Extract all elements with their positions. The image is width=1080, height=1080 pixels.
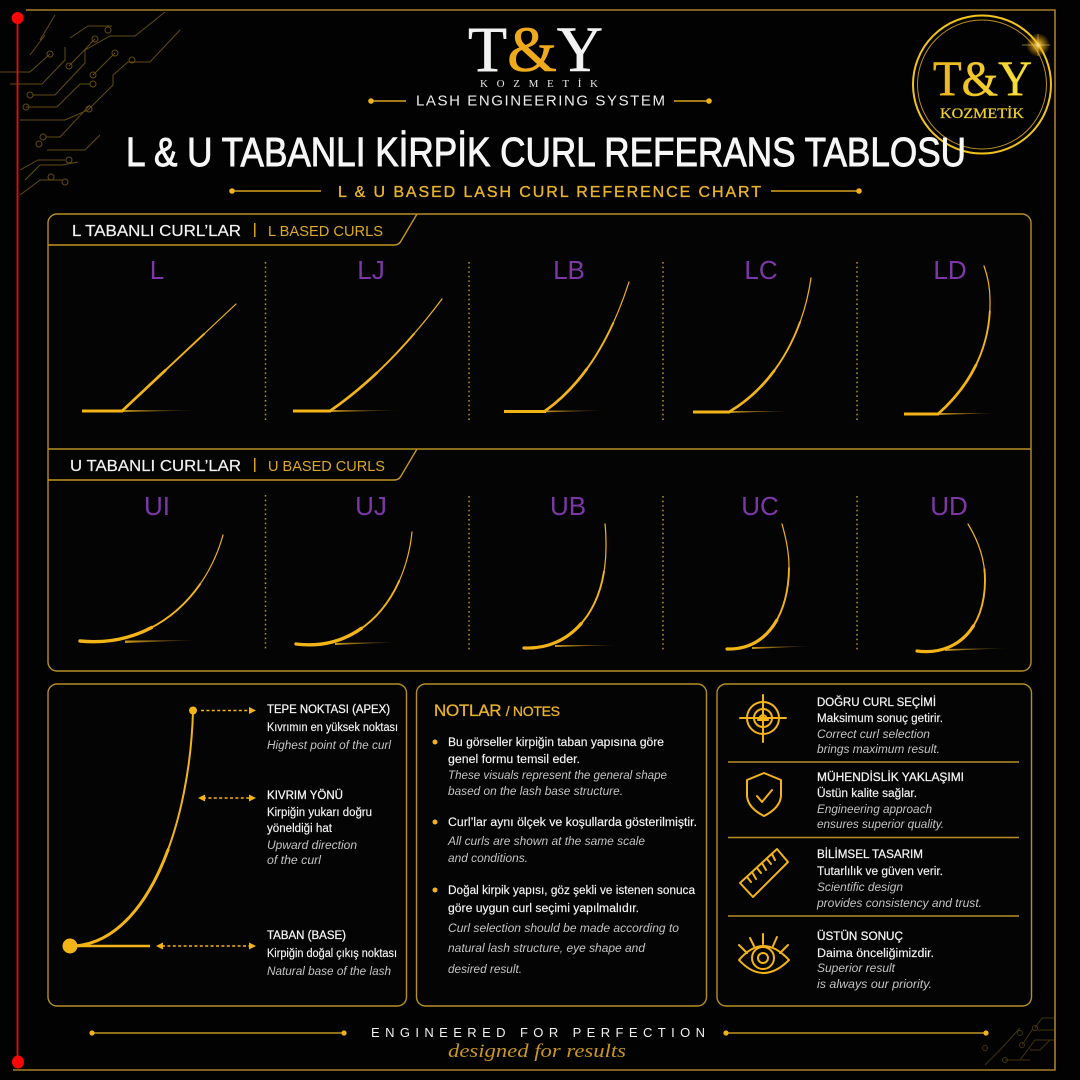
text: base: TABAN (BASE) — [267, 930, 346, 942]
footer: designed for results — [448, 1041, 626, 1062]
panel: notes — [416, 684, 706, 1006]
label: UJ: UJ — [355, 491, 387, 521]
curve: UC — [727, 524, 815, 649]
text: superior result: Daima önceliğimizdir. — [817, 948, 934, 960]
text: superior result: ÜSTÜN SONUÇ — [817, 931, 903, 943]
label: UI: UI — [144, 491, 170, 521]
note 2 — [432, 817, 697, 865]
text: correct curl: Correct curl selection — [817, 729, 930, 741]
text: superior result — [817, 931, 934, 991]
text: scientific design — [816, 848, 982, 910]
curl: LD — [904, 255, 1000, 415]
text: scientific design: BİLİMSEL TASARIM — [817, 848, 923, 861]
panel: curl chart — [48, 214, 1031, 671]
note 2: Curl’lar aynı ölçek ve koşullarda gösterilmiştir. — [448, 817, 697, 829]
text: superior result: Superior result — [817, 963, 896, 975]
curl: LJ — [293, 255, 442, 412]
text: curl direction — [267, 790, 372, 867]
curve: UD — [917, 524, 1010, 652]
curve: L — [82, 304, 236, 412]
text: correct curl: DOĞRU CURL SEÇİMİ — [817, 696, 936, 709]
note 3: Curl selection should be made according to — [448, 923, 680, 935]
text: scientific design: Scientific design — [817, 882, 903, 894]
tab: U based curls: U BASED CURLS — [268, 459, 385, 475]
diagram: lash curve — [62, 706, 197, 954]
panel: lash anatomy — [48, 684, 406, 1006]
label: LC: LC — [744, 255, 778, 285]
icon: ruler — [740, 849, 788, 897]
curl: UI — [80, 491, 223, 643]
text: apex: TEPE NOKTASI (APEX) — [267, 704, 390, 716]
text: base — [267, 930, 397, 978]
text: curl direction: Kirpiğin yukarı doğru — [267, 807, 372, 819]
note 3 — [432, 885, 696, 976]
curl: L — [82, 255, 236, 412]
note 2: All curls are shown at the same scale — [447, 836, 645, 848]
arrow: curl direction — [198, 794, 256, 802]
arrow: apex — [201, 707, 256, 714]
note 1: genel formu temsil eder. — [448, 754, 580, 766]
text: curl direction: of the curl — [267, 855, 321, 867]
text: apex — [267, 704, 398, 752]
note 2: and conditions. — [448, 853, 528, 865]
text: engineering: MÜHENDİSLİK YAKLAŞIMI — [817, 771, 964, 784]
curl: LB — [504, 255, 629, 412]
footer — [89, 1025, 989, 1062]
title: L & U TABANLI KİRPİK CURL REFERANS TABLOSU — [126, 129, 966, 175]
footer: ENGINEERED FOR PERFECTION — [371, 1025, 705, 1040]
note 3: Doğal kirpik yapısı, göz şekli ve istenen sonuca — [448, 885, 696, 897]
text: engineering: ensures superior quality. — [817, 819, 944, 831]
note 1: Bu görseller kirpiğin taban yapısına göre — [448, 737, 664, 749]
red side line — [12, 12, 24, 1068]
icon: shield — [747, 773, 781, 816]
label: UD: UD — [930, 491, 968, 521]
curve: LC — [693, 278, 811, 413]
text: scientific design: provides consistency and trust. — [816, 898, 982, 910]
text: base: Kirpiğin doğal çıkış noktası — [267, 948, 397, 960]
text: engineering: Üstün kalite sağlar. — [817, 788, 917, 800]
curve: UJ — [296, 532, 412, 645]
label: LB: LB — [553, 255, 585, 285]
section divider — [48, 448, 1031, 450]
label: L: L — [150, 255, 164, 285]
subtitle: L & U BASED LASH CURL REFERENCE CHART — [338, 184, 761, 201]
curl: UB — [524, 491, 620, 648]
curve: LJ — [293, 299, 442, 412]
badge: T&Y Kozmetik seal — [913, 16, 1051, 154]
text: engineering: Engineering approach — [817, 804, 932, 816]
circuit decoration: top left — [0, 12, 180, 195]
label: UB: UB — [550, 491, 586, 521]
logo: T&Y Kozmetik: T&Y — [468, 14, 603, 86]
note 3: desired result. — [448, 964, 522, 976]
curve: UI — [80, 535, 223, 643]
logo: T&Y Kozmetik: KOZMETİK — [480, 78, 598, 90]
badge: T&Y Kozmetik seal: T&Y — [933, 50, 1032, 106]
note 1 — [432, 737, 667, 798]
panel: benefits — [717, 684, 1032, 1006]
curve: LD — [904, 266, 1000, 415]
column separators — [266, 262, 857, 650]
text: superior result: is always our priority. — [817, 979, 932, 991]
curl: UD — [917, 491, 1010, 652]
text: correct curl — [817, 696, 943, 756]
heading: notes: NOTLAR / NOTES — [434, 701, 560, 720]
text: apex: Highest point of the curl — [267, 740, 391, 752]
curl: UJ — [296, 491, 412, 645]
circuit decoration: bottom right — [982, 1018, 1055, 1065]
icon: eye — [739, 934, 789, 973]
text: curl direction: yöneldiği hat — [267, 823, 333, 835]
subtitle — [229, 184, 862, 201]
label: UC: UC — [741, 491, 779, 521]
curl: LC — [693, 255, 811, 413]
icon: target — [740, 695, 786, 742]
arrow: base — [156, 942, 256, 950]
tab: U based curls: U TABANLI CURL’LAR — [70, 458, 241, 475]
label: LJ: LJ — [357, 255, 385, 285]
text: scientific design: Tutarlılık ve güven verir. — [817, 866, 943, 878]
curve: LB — [504, 282, 629, 412]
text: apex: Kıvrımın en yüksek noktası — [267, 722, 398, 734]
tab: L based curls: L TABANLI CURL’LAR — [72, 223, 241, 240]
curl: UC — [727, 491, 815, 649]
text: engineering — [817, 771, 964, 831]
text: correct curl: Maksimum sonuç getirir. — [817, 713, 943, 725]
text: correct curl: brings maximum result. — [817, 744, 940, 756]
text: curl direction: Upward direction — [267, 840, 357, 852]
note 1: These visuals represent the general shape — [448, 770, 667, 782]
tab: L based curls: L BASED CURLS — [268, 224, 383, 240]
curve: UB — [524, 524, 620, 648]
note 3: natural lash structure, eye shape and — [448, 943, 646, 955]
note 3: göre uygun curl seçimi yapılmalıdır. — [448, 903, 639, 915]
label: LD: LD — [933, 255, 967, 285]
badge: T&Y Kozmetik seal: KOZMETİK — [940, 106, 1025, 122]
tagline: lash engineering system: LASH ENGINEERING SYSTEM — [416, 92, 665, 110]
tab: L based curls — [48, 214, 417, 245]
text: curl direction: KIVRIM YÖNÜ — [267, 790, 343, 802]
note 1: based on the lash base structure. — [448, 786, 623, 798]
text: base: Natural base of the lash — [267, 966, 391, 978]
tab: U based curls — [48, 449, 417, 480]
